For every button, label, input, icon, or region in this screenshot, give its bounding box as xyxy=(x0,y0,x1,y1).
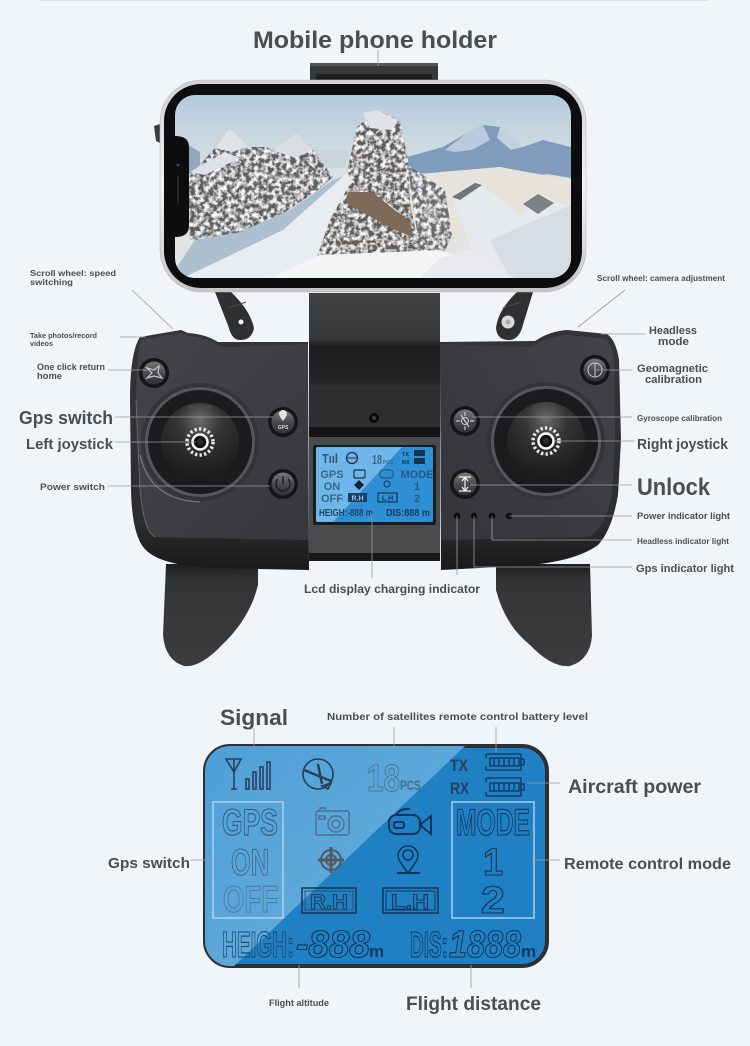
TX RX labels: TX xyxy=(450,756,469,775)
label: aircraft power: Aircraft power xyxy=(568,777,702,798)
distance readout: m xyxy=(521,942,536,961)
left controller grip xyxy=(130,330,309,570)
phone xyxy=(160,80,586,292)
GPS on off box: ON xyxy=(231,842,269,883)
label: scroll wheel camera adjustment: Scroll wheel: camera adjustment xyxy=(597,273,725,283)
LCD callout lines xyxy=(190,727,560,988)
label: power switch: Power switch xyxy=(40,482,105,493)
GPS button: GPS xyxy=(278,425,289,431)
label: gps switch: Gps switch xyxy=(19,408,113,428)
label: left joystick: Left joystick xyxy=(26,436,114,453)
small LCD readouts: ON xyxy=(324,481,340,493)
height readout: HEIGH: xyxy=(222,924,294,965)
small LCD readouts xyxy=(319,450,434,519)
signal icon xyxy=(226,759,270,789)
label: signal: Signal xyxy=(220,705,288,730)
left rock massif xyxy=(186,128,333,240)
geomagnetic button xyxy=(580,355,610,385)
label: headless indicator light: Headless indicator light xyxy=(637,536,729,546)
L.H badge: L.H xyxy=(391,891,429,914)
GPS on off box: OFF xyxy=(223,879,278,920)
phone side button xyxy=(154,124,160,143)
small LCD readouts: R.H xyxy=(351,496,364,502)
label: flight distance: Flight distance xyxy=(406,994,541,1015)
indicator lights xyxy=(454,513,512,519)
label: power indicator light: Power indicator light xyxy=(637,511,730,521)
GPS on off box xyxy=(213,802,283,920)
power button xyxy=(268,469,298,499)
large LCD panel xyxy=(205,746,547,966)
phone holder top clamp xyxy=(310,63,438,82)
satellite icon xyxy=(303,759,333,789)
label: geomagnetic calibration: calibration xyxy=(645,374,702,386)
controller handles xyxy=(163,564,592,666)
label: gps switch (LCD): Gps switch xyxy=(108,855,190,872)
label: geomagnetic calibration: Geomagnetic xyxy=(637,363,708,375)
central rock peak xyxy=(317,110,428,257)
mode box: 2 xyxy=(481,880,505,922)
label: one click return home xyxy=(37,362,105,381)
height readout: m xyxy=(369,942,384,961)
label: scroll wheel speed switching: Scroll wheel: speed xyxy=(30,268,116,278)
crosshair icon xyxy=(318,847,344,873)
label: take photos record videos xyxy=(30,333,97,348)
label: unlock: Unlock xyxy=(637,474,711,501)
mode box xyxy=(452,802,534,922)
mode box: MODE xyxy=(456,802,530,843)
GPS button xyxy=(268,407,298,437)
satellite count readout: PCS xyxy=(400,777,421,793)
distance readout: 1888 xyxy=(449,924,522,966)
controller center column xyxy=(309,293,440,561)
label: right joystick: Right joystick xyxy=(637,437,729,453)
distance readout: DIS: xyxy=(410,924,448,965)
holder arms xyxy=(215,292,533,340)
small LCD readouts: Tııl xyxy=(322,451,338,466)
callout lines on controller xyxy=(108,50,645,578)
label: headless mode: Headless xyxy=(649,325,697,337)
right controller grip xyxy=(440,330,621,570)
label: headless mode xyxy=(649,325,697,348)
unlock button xyxy=(450,469,480,499)
label: number of satellites remote control battery level: Number of satellites remote control battery level xyxy=(327,711,588,723)
right joystick xyxy=(487,382,605,500)
height readout: -888 xyxy=(296,924,371,966)
label: take photos record videos: Take photos/record xyxy=(30,333,97,340)
camera hole xyxy=(369,413,379,423)
label: scroll wheel speed switching xyxy=(30,268,116,287)
label: one click return home: home xyxy=(37,371,62,381)
small LCD readouts: DIS:888 m xyxy=(386,508,430,519)
small LCD readouts: MODE xyxy=(400,469,434,481)
top hairline xyxy=(40,0,708,1)
mode box: 1 xyxy=(483,842,503,884)
small LCD readouts: 1 xyxy=(414,481,420,493)
satellite count readout: 18 xyxy=(367,758,400,800)
GPS on off box: GPS xyxy=(222,802,278,843)
battery icons xyxy=(486,754,524,796)
label: geomagnetic calibration xyxy=(637,363,708,386)
small LCD readouts: OFF xyxy=(321,493,343,505)
small LCD display on controller xyxy=(313,445,436,525)
gyroscope button xyxy=(450,406,480,436)
label: scroll wheel speed switching: switching xyxy=(30,277,73,287)
top heading: mobile phone holder: Mobile phone holder xyxy=(253,27,497,54)
small LCD readouts: TX xyxy=(402,452,409,458)
R.H badge xyxy=(302,888,356,914)
label: lcd display charging indicator: Lcd display charging indicator xyxy=(304,582,480,596)
small LCD readouts: RX xyxy=(402,460,410,466)
home pin icon xyxy=(397,846,420,873)
camera icon xyxy=(316,808,349,835)
label: gyroscope calibration: Gyroscope calibration xyxy=(637,413,722,423)
distance readout xyxy=(410,924,536,966)
small LCD readouts: PCS xyxy=(383,460,394,466)
label: gps indicator light: Gps indicator light xyxy=(636,563,734,575)
small LCD readouts: L.H xyxy=(382,496,393,502)
small LCD readouts: 2 xyxy=(414,493,420,505)
label: one click return home: One click return xyxy=(37,362,105,372)
small LCD readouts: GPS xyxy=(320,469,344,481)
phone notch xyxy=(175,136,189,237)
TX RX labels: RX xyxy=(450,779,470,798)
phone screen photo: snowy mountains xyxy=(175,95,571,278)
label: flight altitude: Flight altitude xyxy=(269,998,329,1008)
label: remote control mode: Remote control mode xyxy=(564,856,731,873)
video camera icon xyxy=(389,809,431,834)
label: take photos record videos: videos xyxy=(30,341,53,348)
return home button xyxy=(139,358,169,388)
left joystick xyxy=(140,383,259,502)
R.H badge: R.H xyxy=(310,891,348,914)
TX RX labels xyxy=(450,756,470,798)
label: headless mode: mode xyxy=(658,336,689,348)
small LCD readouts: 18 xyxy=(372,452,382,467)
L.H badge xyxy=(383,888,438,914)
small LCD readouts: HEIGH:-888 m xyxy=(319,508,373,519)
